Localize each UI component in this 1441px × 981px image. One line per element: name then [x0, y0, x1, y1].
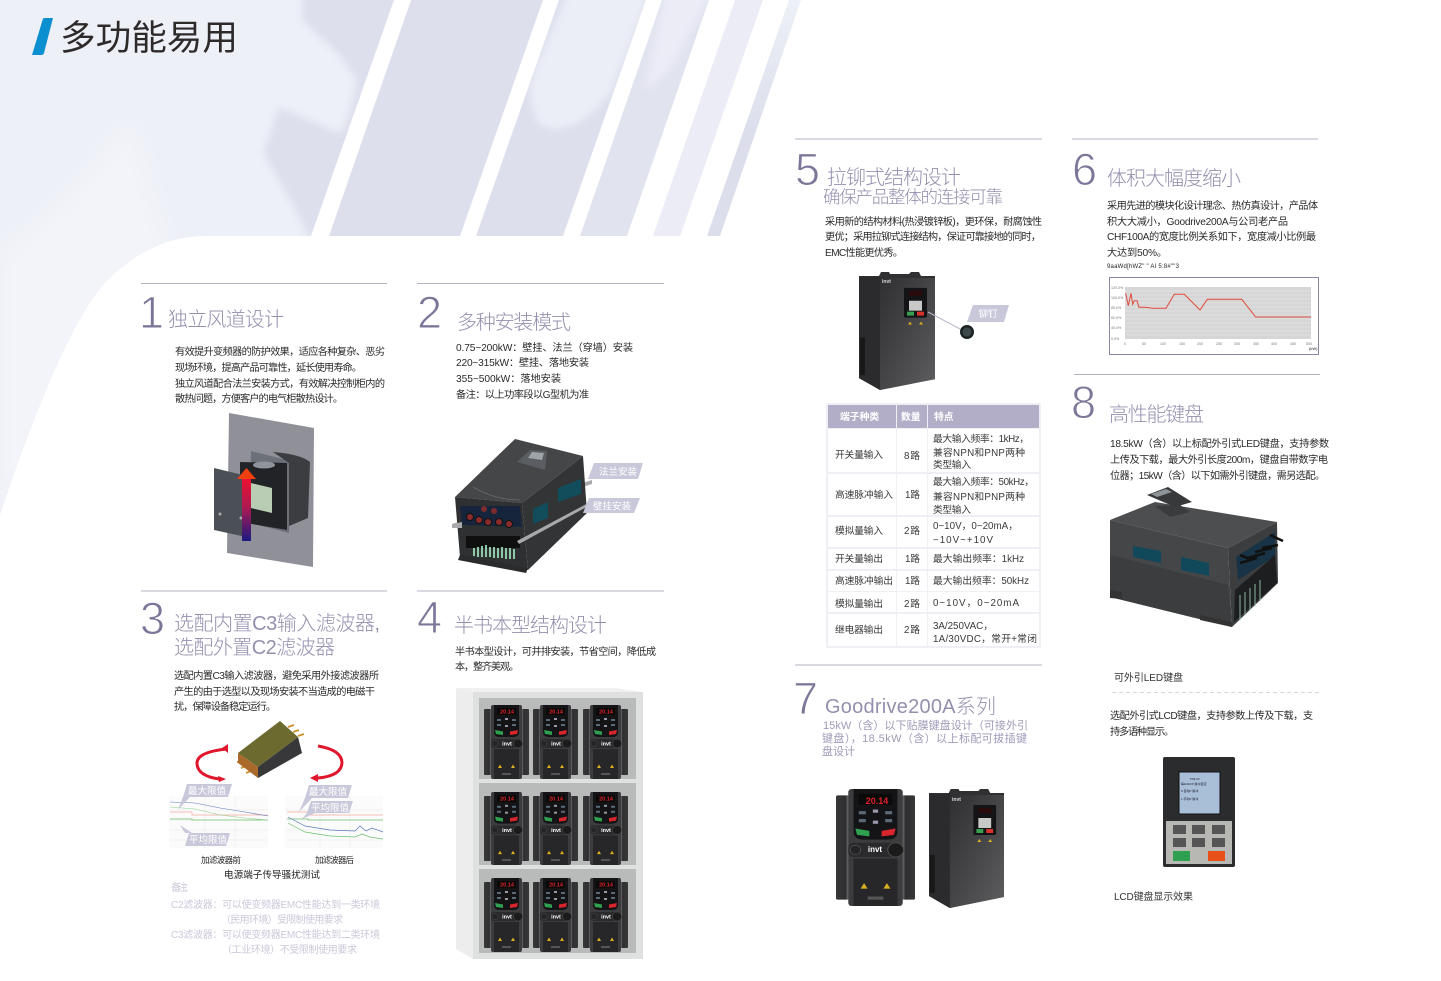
illustration: cabinet with nine drives: invt [601, 828, 611, 834]
illustration: cabinet with nine drives: 20.14 [500, 796, 515, 802]
body text 3: 产生的由于选型以及现场安装不当造成的电磁干 [174, 685, 375, 698]
number 6: 6 [1072, 144, 1097, 195]
line chart: width ratio [1110, 278, 1318, 354]
number 5: 5 [795, 144, 820, 195]
table: terminal types: 0~10V，0~20mA， [933, 521, 1018, 532]
table: terminal types [826, 403, 1041, 648]
body text 2: 备注：以上功率段以G型机为准 [456, 388, 589, 401]
line chart: width ratio: (kW) [1309, 346, 1318, 351]
heading 5: 确保产品整体的连接可靠 [823, 187, 1003, 207]
line chart: width ratio: 80.0% [1111, 306, 1122, 310]
illustration: cabinet with nine drives: 20.14 [500, 710, 515, 716]
illustration: LCD keypad: 1:手动P 脉冲 [1181, 796, 1198, 801]
body text 8: 位器；15kW（含）以下如需外引键盘，需另选配。 [1110, 469, 1325, 482]
heading 1: 独立风道设计 [168, 308, 284, 331]
illustration: tower drive [929, 789, 1004, 908]
body text 6: 大达到50%。 [1107, 246, 1167, 259]
panel 2: 多种安装模式 [417, 284, 664, 573]
table: terminal types: 0~10V，0~20mA [933, 598, 1019, 609]
body text: LCD keypad [1110, 709, 1313, 738]
heading 3: 选配内置C3输入滤波器, [174, 612, 380, 635]
illustration: cabinet with nine drives: 20.14 [549, 796, 564, 802]
body text 1: 散热问题，方便客户的电气柜散热设计。 [175, 392, 343, 405]
illustration: cabinet with nine drives: invt [502, 742, 512, 748]
panel 3: C3 and C2 filters [140, 591, 387, 956]
notes on filters [171, 881, 380, 956]
illustration: small drive: invt [868, 845, 882, 854]
table: terminal types: 类型输入 [933, 503, 971, 516]
arrow: red curved right [310, 746, 342, 782]
notes on filters: C3滤波器：可以使变频器EMC性能达到二类环境 [171, 928, 380, 941]
table: terminal types: 兼容NPN和PNP两种 [933, 490, 1025, 503]
notes on filters: 备注： [171, 881, 194, 894]
line chart: width ratio: 0.0% [1111, 337, 1120, 341]
table: terminal types: −10V~+10V [933, 535, 993, 546]
callouts on charts: 最大限值 [188, 785, 226, 797]
line chart: width ratio: 100 [1160, 342, 1166, 346]
callouts on charts: 平均限值 [189, 834, 227, 846]
illustration: LCD keypad: 每E320/P 脉冲自定 [1181, 781, 1207, 786]
body text 1 [175, 345, 385, 405]
heading 6: 体积大幅度缩小 [1107, 167, 1241, 190]
line chart: width ratio: 60.0% [1111, 316, 1122, 320]
panel 1: 独立风道设计 [139, 284, 387, 567]
line chart: width ratio: 450 [1290, 342, 1296, 346]
number 7: 7 [793, 673, 818, 724]
illustration: tower drive: invt [952, 797, 961, 803]
body text 6: 积大大减小，Goodrive200A与公司老产品 [1107, 215, 1288, 228]
heading text: 多功能易用 [60, 19, 238, 58]
body text 3 [174, 669, 379, 713]
illustration: cabinet with nine drives [456, 688, 643, 959]
body text 6: 采用先进的模块化设计理念、热仿真设计，产品体 [1107, 199, 1318, 212]
heading 3: 选配外置C2滤波器 [174, 636, 335, 659]
caption: LCD keypad: LCD键盘显示效果 [1114, 890, 1193, 903]
heading 8: 高性能键盘 [1109, 403, 1204, 426]
number 3: 3 [140, 593, 165, 644]
table: terminal types: 高速脉冲输出 [835, 574, 893, 587]
table: terminal types: 1路 [905, 488, 920, 501]
heading 5 [823, 166, 1003, 207]
heading 4: 半书本型结构设计 [454, 614, 607, 637]
line chart: width ratio: 200 [1197, 342, 1203, 346]
table: terminal types: 开关量输出 [835, 552, 883, 565]
body text 8: 18.5kW（含）以上标配外引式LED键盘，支持参数 [1110, 437, 1329, 450]
illustration: cabinet with nine drives: 20.14 [599, 710, 614, 716]
chart captions: 电源端子传导骚扰测试 [224, 869, 320, 881]
body text 8: 上传及下载，最大外引长度200m，键盘自带数字电 [1110, 453, 1328, 466]
illustration: small drive: 20.14 [866, 796, 888, 806]
callouts on charts: 平均限值 [311, 802, 349, 814]
illustration: cabinet with nine drives: invt [551, 828, 561, 834]
illustration: cabinet with nine drives: invt [601, 914, 611, 920]
body text 4: 半书本型设计，可并排安装，节省空间，降低成 [455, 645, 656, 658]
panel 5: 拉铆式结构设计 [795, 139, 1042, 648]
subtitle 7 [822, 718, 1028, 758]
table: terminal types: 高速脉冲输入 [835, 488, 893, 501]
illustration: flange mounted drive with airflow arrow [214, 413, 314, 567]
body text 4: 本，整齐美观。 [455, 660, 519, 673]
callouts on charts: 最大限值 [309, 786, 347, 798]
table: terminal types: 模拟量输出 [835, 597, 883, 610]
body text 6: CHF100A的宽度比例关系如下，宽度减小比例最 [1107, 230, 1316, 243]
chart caption: 9aaWd[hWZ" " AI 5:8#""3 [1107, 264, 1180, 270]
chart captions: 加滤波器后 [315, 855, 354, 865]
line chart: width ratio: 150 [1179, 342, 1185, 346]
title: 多功能易用 [32, 18, 238, 58]
callout: 壁挂安装: 壁挂安装 [593, 500, 631, 512]
subtitle 7: 15kW（含）以下贴膜键盘设计（可接外引 [823, 718, 1028, 732]
table: terminal types: 1A/30VDC，常开+常闭 [933, 632, 1037, 645]
body text 5: 采用新的结构材料(热浸镀锌板)，更环保，耐腐蚀性 [825, 215, 1042, 228]
body text: LCD keypad: 选配外引式LCD键盘，支持参数上传及下载，支 [1110, 709, 1313, 722]
caption: LED keypad: 可外引LED键盘 [1114, 671, 1183, 684]
illustration: tower drive: invt [882, 279, 891, 285]
body text 6 [1107, 199, 1318, 259]
number 1: 1 [139, 287, 164, 338]
line chart: width ratio: 250 [1216, 342, 1222, 346]
notes on filters: （工业环境）不受限制使用要求 [222, 943, 357, 956]
icon: blue slanted bar [32, 18, 53, 55]
body text 2: 0.75~200kW：壁挂、法兰（穿墙）安装 [456, 341, 633, 354]
heading 2: 多种安装模式 [457, 311, 571, 334]
table: terminal types: 8路 [904, 449, 920, 462]
table: terminal types: 2路 [904, 623, 920, 636]
line chart: width ratio: 50 [1142, 342, 1146, 346]
table: terminal types: 模拟量输入 [835, 524, 883, 537]
table: terminal types: 1路 [905, 552, 920, 565]
chart captions [201, 855, 354, 881]
callout: 铆钉 rivet [928, 305, 1009, 339]
table: terminal types: 最大输出频率：1kHz [933, 552, 1024, 565]
body text 3: 扰，保障设备稳定运行。 [174, 700, 276, 713]
body text: LCD keypad: 持多语种显示。 [1110, 725, 1174, 738]
body text 8 [1110, 437, 1329, 482]
line chart: width ratio: 40.0% [1111, 326, 1122, 330]
illustration: cabinet with nine drives: 20.14 [599, 882, 614, 888]
illustration: cabinet with nine drives: invt [502, 914, 512, 920]
chart: before filter [169, 796, 268, 848]
line chart: width ratio: 0 [1124, 342, 1126, 346]
body text 2: 355~500kW：落地安装 [456, 372, 561, 385]
callout: 法兰安装: 法兰安装 [599, 466, 637, 478]
heading 7: Goodrive200A系列 [825, 695, 996, 718]
table: terminal types: 1路 [905, 574, 920, 587]
line chart: width ratio: 400 [1271, 342, 1277, 346]
illustration: cabinet with nine drives: 20.14 [500, 882, 515, 888]
illustration: cabinet with nine drives: invt [551, 914, 561, 920]
line chart: width ratio: 120.0% [1111, 286, 1124, 290]
notes on filters: C2滤波器：可以使变频器EMC性能达到一类环境 [171, 898, 380, 911]
table: terminal types: 特点 [934, 410, 954, 423]
heading 3 [174, 612, 380, 659]
illustration: filter module [237, 721, 304, 778]
body text 4 [455, 645, 656, 673]
illustration: small drive [836, 789, 915, 906]
arrow: red curved left [197, 744, 228, 782]
illustration: cabinet with nine drives: invt [502, 828, 512, 834]
table: terminal types: 端子种类 [840, 410, 879, 423]
chart captions: 加滤波器前 [201, 855, 241, 865]
line chart: width ratio: 300 [1234, 342, 1240, 346]
body text 5 [825, 215, 1042, 259]
background: header band with gear and stripes [0, 0, 810, 520]
heading 5: 拉铆式结构设计 [827, 166, 961, 189]
table: terminal types: 最大输入频率：50kHz， [933, 475, 1034, 488]
table: terminal types: 开关量输入 [835, 448, 883, 461]
illustration: LCD keypad: P99.00 [1190, 777, 1200, 781]
body text 1: 现场环境，提高产品可靠性，延长使用寿命。 [175, 361, 362, 374]
body text 1: 独立风道配合法兰安装方式，有效解决控制柜内的 [175, 377, 385, 390]
body text 3: 选配内置C3输入滤波器，避免采用外接滤波器所 [174, 669, 379, 682]
panel 6: 体积大幅度缩小 [1072, 139, 1318, 354]
panel 7: Goodrive200A系列 [793, 665, 1042, 908]
callouts on charts [178, 784, 353, 846]
subtitle 7: 盘设计 [822, 744, 855, 758]
body text 2: 220~315kW：壁挂、落地安装 [456, 356, 589, 369]
subtitle 7: 键盘），18.5kW（含）以上标配可拔插键 [822, 731, 1027, 745]
line chart: width ratio: 350 [1253, 342, 1259, 346]
table: terminal types: 最大输出频率：50kHz [933, 574, 1029, 587]
table: terminal types: 继电器输出 [835, 623, 883, 636]
illustration: tower drive [859, 272, 935, 390]
callout: 法兰安装 [588, 463, 643, 479]
illustration: box drive with mounting plates [452, 439, 592, 573]
body text 5: 更优；采用拉铆式连接结构，保证可靠接地的同时， [825, 230, 1041, 243]
notes on filters: （民用环境）受限制使用要求 [221, 913, 343, 926]
line chart: width ratio: 500 [1306, 342, 1312, 346]
number 4: 4 [417, 592, 442, 643]
callout: 壁挂安装 [583, 498, 640, 513]
table: terminal types: 数量 [901, 410, 921, 423]
illustration: cabinet with nine drives: invt [551, 742, 561, 748]
table: terminal types: 2路 [904, 524, 920, 537]
illustration: LCD keypad: 0:自动P 脉冲 [1181, 788, 1198, 793]
table: terminal types: 2路 [904, 597, 920, 610]
table: terminal types: 兼容NPN和PNP两种 [933, 446, 1025, 459]
illustration: cabinet with nine drives: 20.14 [549, 710, 564, 716]
table: terminal types: 3A/250VAC， [933, 621, 993, 632]
body text 5: EMC性能更优秀。 [825, 246, 903, 259]
panel 8: 高性能键盘 [1071, 374, 1329, 903]
body text 1: 有效提升变频器的防护效果，适应各种复杂、恶劣 [175, 345, 385, 358]
table: terminal types: 最大输入频率：1kHz， [933, 432, 1029, 445]
number 2: 2 [417, 287, 442, 338]
illustration: box drive with LED keypad [1110, 487, 1283, 627]
illustration: cabinet with nine drives: 20.14 [599, 796, 614, 802]
line chart: width ratio: 100.0% [1111, 296, 1124, 300]
illustration: cabinet with nine drives: 20.14 [549, 882, 564, 888]
panel 4: 半书本型结构设计 [417, 591, 664, 959]
number 8: 8 [1071, 377, 1096, 428]
chart: after filter [285, 796, 383, 848]
illustration: LCD keypad [1163, 757, 1235, 867]
table: terminal types: 类型输入 [933, 458, 971, 471]
callout: 铆钉 rivet: 铆钉 [978, 308, 998, 320]
body text 2 [456, 341, 633, 401]
illustration: cabinet with nine drives: invt [601, 742, 611, 748]
